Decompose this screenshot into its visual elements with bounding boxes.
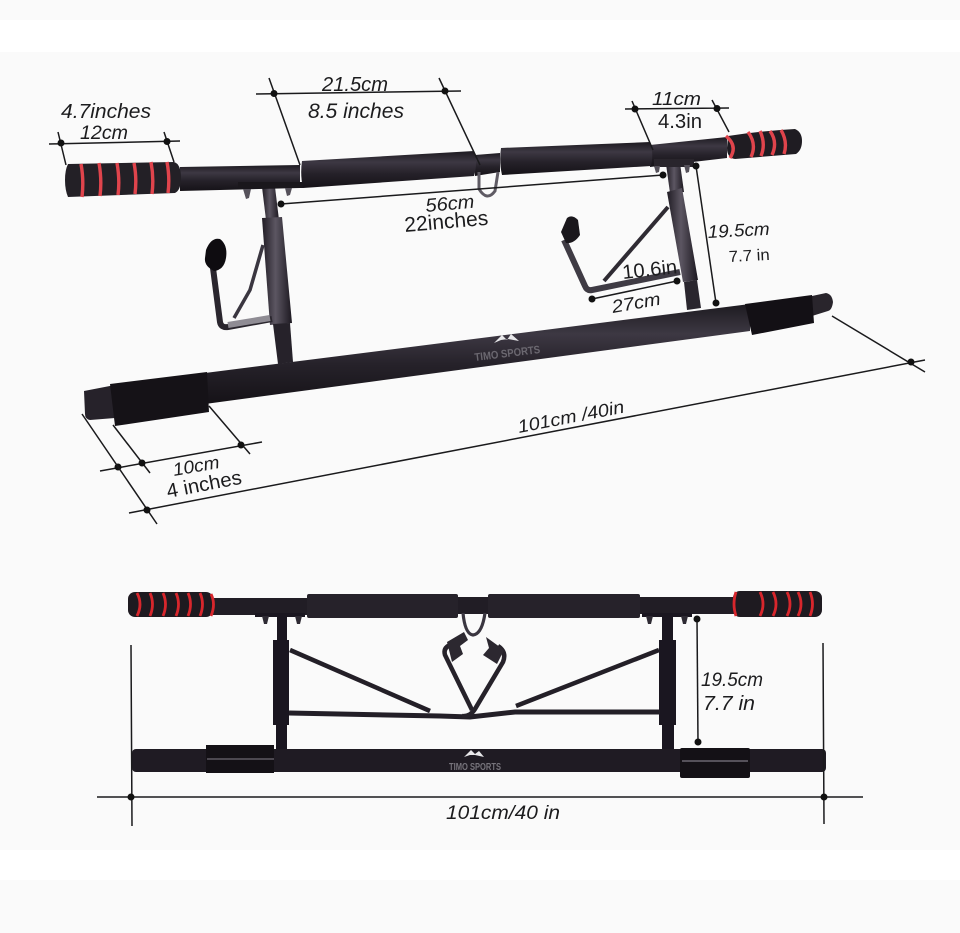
centre hooks bbox=[445, 632, 504, 716]
dimension: height: 19.5cm bbox=[701, 670, 763, 691]
upper bar bbox=[180, 137, 727, 199]
panel: angled product view bbox=[49, 74, 925, 524]
left foam grip bbox=[65, 162, 181, 197]
lower bar bbox=[132, 745, 826, 778]
dimension: overall length: 101cm/40 in bbox=[446, 803, 560, 824]
dimension: overall length: 101cm /40in bbox=[516, 397, 626, 437]
dimension: hook arm: 10.6in bbox=[621, 256, 678, 284]
dimension: grip length: 12cm bbox=[80, 123, 128, 144]
dimension: height: 19.5cm bbox=[707, 219, 770, 242]
legs bbox=[273, 614, 676, 751]
left foam grip bbox=[128, 592, 214, 617]
dimension: centre pad: 21.5cm bbox=[321, 74, 388, 96]
dimension: width between legs bbox=[278, 172, 666, 237]
dimension: overall length bbox=[82, 316, 925, 524]
left support leg bbox=[262, 187, 293, 364]
dimension: height: 7.7 in bbox=[703, 693, 755, 715]
dimension: grip length bbox=[49, 101, 180, 165]
panel: front product view bbox=[97, 591, 863, 826]
dimension: end sleeve: 10cm bbox=[171, 452, 221, 480]
dimension: width between legs: 22inches bbox=[403, 207, 489, 237]
dimension: end sleeve: 4 inches bbox=[165, 467, 244, 503]
dimension: width between legs: 56cm bbox=[425, 192, 475, 217]
brand logo bbox=[474, 334, 541, 364]
right support leg bbox=[666, 163, 701, 310]
brand logo: TIMO SPORTS bbox=[474, 344, 541, 364]
dimension: hook arm bbox=[588, 256, 680, 317]
right hook arm bbox=[561, 207, 680, 290]
dimension: height bbox=[694, 616, 763, 746]
dimension: centre pad: 8.5 inches bbox=[308, 100, 404, 123]
dimension: height bbox=[692, 162, 770, 306]
lower bar bbox=[84, 293, 833, 426]
left hook arm bbox=[205, 239, 272, 327]
dimension: grip length: 4.7inches bbox=[61, 101, 151, 123]
brand logo: TIMO SPORTS bbox=[449, 762, 501, 773]
right foam grip bbox=[733, 591, 822, 617]
dimension: side section bbox=[625, 89, 729, 150]
upper bar bbox=[213, 594, 736, 635]
dimension: height: 7.7 in bbox=[728, 247, 770, 266]
cross bar and braces bbox=[289, 650, 660, 717]
brand logo bbox=[449, 750, 501, 773]
dimension: side section: 4.3in bbox=[658, 111, 702, 133]
right foam grip bbox=[726, 129, 802, 159]
dimension: hook arm: 27cm bbox=[609, 289, 662, 317]
dimension: side section: 11cm bbox=[652, 89, 701, 109]
dimension: end sleeve bbox=[100, 406, 262, 503]
dimension: centre pad bbox=[256, 74, 480, 165]
dimension: overall length bbox=[97, 643, 863, 826]
